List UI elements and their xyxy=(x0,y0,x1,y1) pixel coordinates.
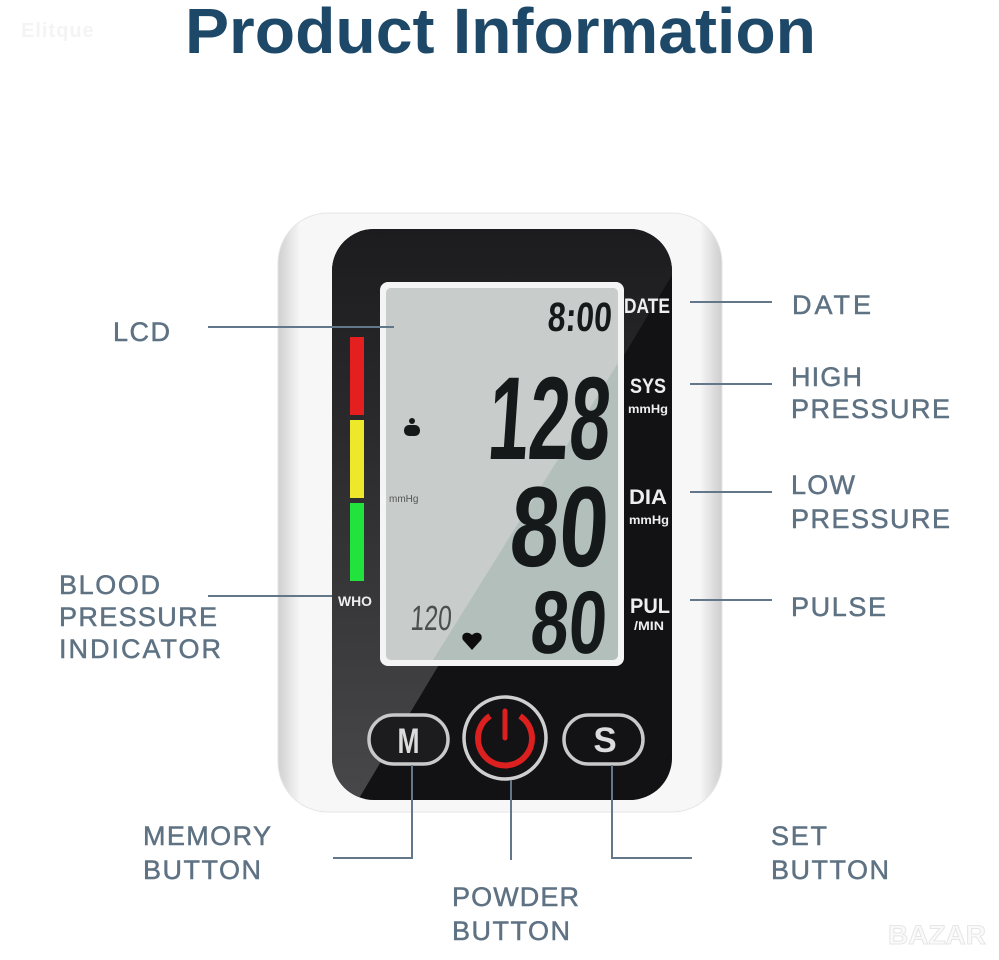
black front panel xyxy=(332,229,672,800)
panel labels: /MIN xyxy=(634,619,664,633)
callout: blood pressure indicator xyxy=(59,570,332,664)
LCD systolic reading: 128 xyxy=(484,353,615,485)
M button xyxy=(369,715,448,764)
callout: date: DATE xyxy=(792,290,871,320)
callout: power button xyxy=(452,780,579,946)
device: blood pressure monitor xyxy=(278,213,722,812)
callout: blood pressure indicator: INDICATOR xyxy=(59,634,221,664)
LCD unit mmHg: mmHg xyxy=(389,494,418,505)
blood pressure indicator bars xyxy=(338,337,372,609)
LCD screen xyxy=(380,282,624,672)
panel labels: DATE xyxy=(624,295,670,318)
panel labels: PUL xyxy=(630,595,670,618)
callout: high pressure: HIGH xyxy=(791,362,862,392)
callout: blood pressure indicator: BLOOD xyxy=(59,570,160,600)
callout: memory button: BUTTON xyxy=(143,855,261,885)
callout: LCD: LCD xyxy=(113,317,170,347)
M button: M xyxy=(398,722,420,761)
callout: low pressure xyxy=(690,470,950,534)
callout: pulse: PULSE xyxy=(791,592,886,622)
S button xyxy=(564,715,643,764)
LCD user icon xyxy=(404,418,420,436)
callout: power button: POWDER xyxy=(452,882,579,912)
callout: power button: BUTTON xyxy=(452,916,570,946)
panel labels: DIA xyxy=(629,486,667,509)
callout: set button: SET xyxy=(771,821,827,851)
panel labels: mmHg xyxy=(628,402,668,416)
callout: set button xyxy=(612,765,889,885)
callout: memory button: MEMORY xyxy=(143,821,271,851)
LCD heart icon xyxy=(462,633,482,650)
watermark: Elitque: Elitque xyxy=(21,20,95,42)
panel labels xyxy=(624,295,670,633)
callout: set button: BUTTON xyxy=(771,855,889,885)
callout: low pressure: LOW xyxy=(791,470,856,500)
LCD pulse reading: 80 xyxy=(528,572,611,672)
device body xyxy=(278,213,722,812)
panel labels: mmHg xyxy=(629,513,669,527)
callout: high pressure xyxy=(690,362,950,424)
power button xyxy=(464,697,546,779)
callout: high pressure: PRESSURE xyxy=(791,394,950,424)
WHO label: WHO xyxy=(338,594,372,609)
watermark: Bazar: BAZAR xyxy=(888,920,986,950)
LCD small memory reading: 120 xyxy=(409,599,453,638)
panel labels: SYS xyxy=(630,375,666,398)
LCD time: 8:00 xyxy=(546,294,614,340)
S button: S xyxy=(593,721,617,760)
LCD diastolic reading: 80 xyxy=(506,464,613,591)
callout: memory button xyxy=(143,765,412,885)
callout: blood pressure indicator: PRESSURE xyxy=(59,602,217,632)
callout: low pressure: PRESSURE xyxy=(791,504,950,534)
